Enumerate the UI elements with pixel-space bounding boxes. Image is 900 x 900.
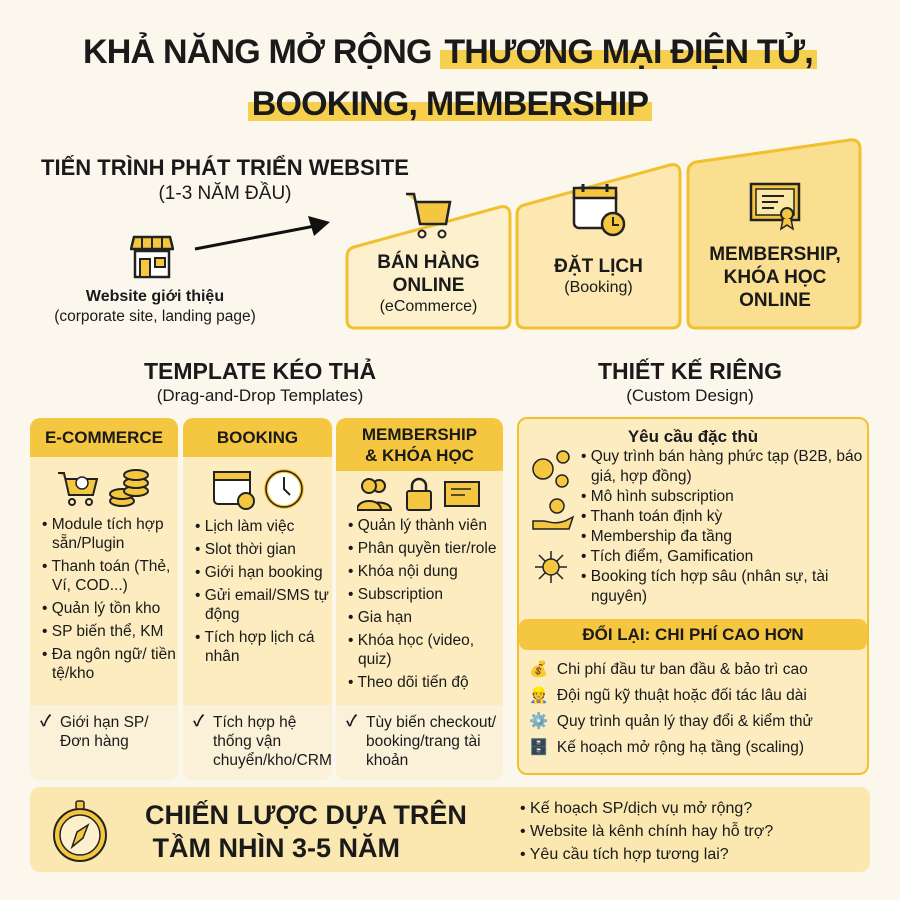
list: questions: • Website là kênh chính hay hỗ trợ? bbox=[520, 823, 773, 840]
panel: ecommerce: • Thanh toán (Thẻ, Ví, COD...) bbox=[42, 558, 170, 594]
title: BOOKING, MEMBERSHIP bbox=[252, 85, 648, 123]
panel: custom design: • Tích điểm, Gamification bbox=[581, 548, 753, 565]
panel: ecommerce: • Quản lý tồn kho bbox=[42, 600, 160, 617]
card: membership: KHÓA HỌC bbox=[724, 267, 826, 288]
panel: membership: • Khóa nội dung bbox=[348, 563, 458, 580]
card: ecommerce: ONLINE bbox=[393, 275, 464, 296]
list: questions: • Kế hoạch SP/dịch vụ mở rộng? bbox=[520, 800, 752, 817]
panel: ecommerce: • Đa ngôn ngữ/ tiền tệ/kho bbox=[42, 646, 176, 682]
panel: custom design bbox=[517, 417, 869, 775]
card: ecommerce: BÁN HÀNG bbox=[377, 252, 480, 273]
card: ecommerce: (eCommerce) bbox=[380, 298, 477, 315]
heading: custom bbox=[598, 358, 782, 405]
icon: users lock cert bbox=[357, 478, 480, 511]
text: website gioi thieu bbox=[54, 288, 256, 325]
heading: yeu cau dac thu: Yêu cầu đặc thù bbox=[628, 427, 758, 446]
title bbox=[83, 32, 817, 123]
panel: booking bbox=[183, 418, 332, 780]
panel: membership: & KHÓA HỌC bbox=[365, 446, 474, 465]
panel: membership: • Subscription bbox=[348, 586, 443, 603]
panel: custom design: • Thanh toán định kỳ bbox=[581, 508, 722, 525]
list: costs: 💰 Chi phí đầu tư ban đầu & bảo trì cao bbox=[529, 661, 808, 678]
heading bar: doi lai bbox=[519, 619, 867, 650]
card: booking bbox=[554, 184, 643, 296]
list: costs bbox=[529, 660, 813, 756]
icons: requirements bbox=[532, 450, 574, 583]
list: costs: ⚙️ Quy trình quản lý thay đổi & kiểm thử bbox=[529, 713, 813, 730]
panel: ecommerce: Giới hạn SP/ Đơn hàng bbox=[60, 714, 149, 750]
panel: booking: • Lịch làm việc bbox=[195, 518, 294, 535]
heading: website progression: (1-3 NĂM ĐẦU) bbox=[158, 183, 292, 204]
panel: membership: MEMBERSHIP bbox=[362, 425, 477, 444]
heading: template bbox=[144, 358, 376, 405]
text: strategy title: CHIẾN LƯỢC DỰA TRÊN bbox=[145, 800, 467, 830]
card: booking: (Booking) bbox=[564, 279, 633, 296]
panel: custom design: • Mô hình subscription bbox=[581, 488, 734, 505]
icon: compass bbox=[53, 800, 107, 862]
panel: ecommerce: E-COMMERCE bbox=[45, 428, 163, 447]
panel: custom design: • Membership đa tầng bbox=[581, 528, 732, 545]
panel: ecommerce bbox=[30, 418, 178, 780]
panel: booking: • Slot thời gian bbox=[195, 541, 296, 558]
heading bar: doi lai: ĐỔI LẠI: CHI PHÍ CAO HƠN bbox=[582, 625, 804, 644]
text: website gioi thieu: (corporate site, landing page) bbox=[54, 308, 256, 325]
card: membership: ONLINE bbox=[739, 290, 811, 311]
text: strategy title bbox=[145, 800, 467, 863]
list: costs: 👷 Đội ngũ kỹ thuật hoặc đối tác lâu dài bbox=[529, 687, 807, 704]
panel: custom design: • Quy trình bán hàng phức tạp (B2B, báo giá, hợp đồng) bbox=[581, 448, 862, 485]
panel: strategy bbox=[30, 787, 870, 872]
panel: ecommerce: • Module tích hợp sẵn/Plugin bbox=[42, 516, 164, 552]
panel: booking: • Tích hợp lịch cá nhân bbox=[195, 629, 315, 665]
heading: template: TEMPLATE KÉO THẢ bbox=[144, 358, 376, 384]
heading: website progression bbox=[41, 154, 409, 204]
panel: membership: • Khóa học (video, quiz) bbox=[348, 632, 474, 668]
list: questions bbox=[520, 800, 773, 863]
panel: ecommerce: • SP biến thể, KM bbox=[42, 623, 163, 640]
heading: custom: (Custom Design) bbox=[626, 386, 754, 405]
panel: booking: • Giới hạn booking bbox=[195, 564, 323, 581]
card: membership bbox=[709, 182, 841, 311]
panel: membership: Tùy biến checkout/ booking/trang tài khoản bbox=[366, 714, 496, 769]
heading: website progression: TIẾN TRÌNH PHÁT TRIỂN WEBSITE bbox=[41, 155, 409, 180]
list: questions: • Yêu cầu tích hợp tương lai? bbox=[520, 846, 729, 863]
panel: membership: • Quản lý thành viên bbox=[348, 517, 487, 534]
panel: membership: • Phân quyền tier/role bbox=[348, 540, 496, 557]
heading: template: (Drag-and-Drop Templates) bbox=[157, 386, 363, 405]
text: website gioi thieu: Website giới thiệu bbox=[86, 288, 224, 305]
card: booking: ĐẶT LỊCH bbox=[554, 256, 643, 277]
panel: membership: • Theo dõi tiến độ bbox=[348, 674, 469, 691]
panel: booking: Tích hợp hệ thống vận chuyển/kho/CRM bbox=[213, 714, 332, 769]
icon: calendar clock bbox=[213, 469, 304, 510]
list: costs: 🗄️ Kế hoạch mở rộng hạ tầng (scaling) bbox=[529, 739, 804, 756]
arrow bbox=[194, 216, 330, 250]
heading: custom: THIẾT KẾ RIÊNG bbox=[598, 358, 782, 384]
icon: cart coins bbox=[58, 469, 149, 507]
card: ecommerce bbox=[377, 192, 480, 315]
stage cards bbox=[346, 138, 862, 330]
panel: membership bbox=[336, 418, 503, 780]
title: KHẢ NĂNG MỞ RỘNG THƯƠNG MẠI ĐIỆN TỬ, bbox=[83, 33, 813, 71]
text: strategy title: TẦM NHÌN 3-5 NĂM bbox=[152, 833, 400, 863]
panel: membership: • Gia hạn bbox=[348, 609, 412, 626]
panel: booking: BOOKING bbox=[217, 428, 298, 447]
panel: booking: • Gửi email/SMS tự động bbox=[195, 587, 329, 623]
icon: store bbox=[130, 236, 174, 278]
panel: custom design: • Booking tích hợp sâu (nhân sự, tài nguyên) bbox=[581, 568, 828, 605]
card: membership: MEMBERSHIP, bbox=[709, 244, 841, 265]
